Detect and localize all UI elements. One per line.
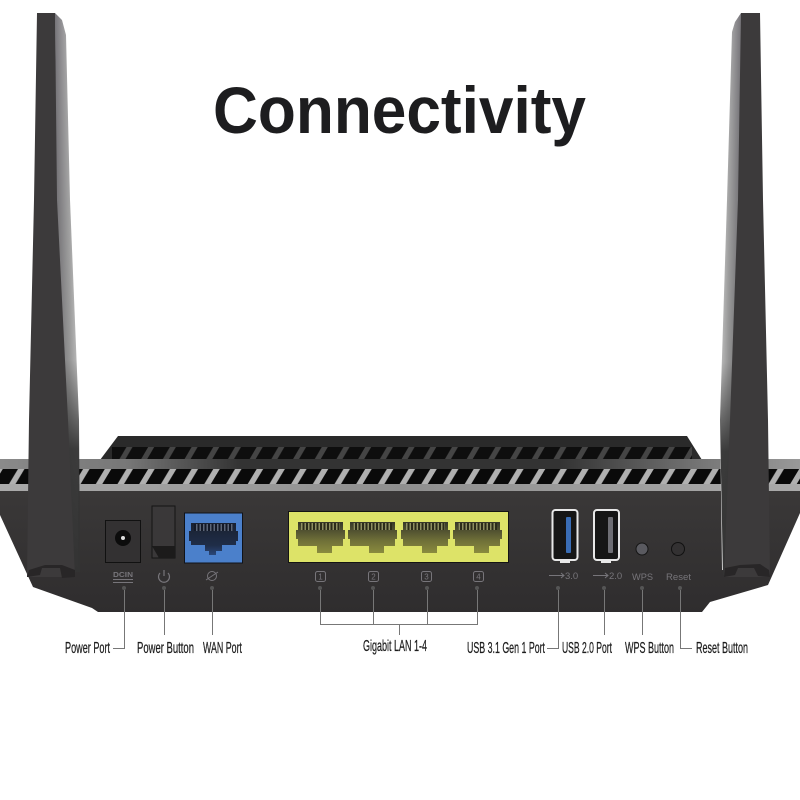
USB 2.0 port	[593, 510, 622, 590]
WPS button: WPS	[632, 572, 653, 583]
LAN number labels: 3	[424, 572, 429, 582]
power button	[152, 506, 175, 590]
rear panel	[0, 491, 800, 612]
USB 3.0 port	[549, 510, 578, 590]
USB 3.0 port: 3.0	[565, 571, 578, 582]
LAN ports	[288, 512, 508, 590]
LAN port 4	[453, 522, 502, 553]
LAN number labels: 4	[476, 572, 481, 582]
connector lines	[113, 590, 692, 648]
port labels: Power Port	[65, 640, 110, 657]
WAN port	[184, 513, 242, 590]
WPS button	[632, 543, 653, 590]
LAN port 3	[401, 522, 450, 553]
LAN number labels	[316, 572, 484, 582]
top vent wedge	[100, 436, 702, 460]
LAN port 2	[348, 522, 397, 553]
title: Connectivity	[213, 73, 586, 147]
port labels: USB 3.1 Gen 1 Port	[467, 640, 545, 657]
port labels: WPS Button	[625, 640, 674, 657]
power port	[106, 520, 140, 590]
rear vent strip	[0, 459, 800, 491]
port labels: Gigabit LAN 1-4	[363, 638, 427, 655]
reset button: Reset	[666, 572, 691, 583]
reset button	[666, 542, 691, 590]
power port: DCIN	[113, 572, 133, 579]
port labels: USB 2.0 Port	[562, 640, 612, 657]
port labels: Reset Button	[696, 640, 748, 657]
LAN number labels: 1	[318, 572, 323, 582]
left antenna	[27, 13, 80, 578]
port labels: WAN Port	[203, 640, 242, 657]
port labels	[65, 638, 748, 657]
right antenna	[720, 13, 770, 577]
USB 2.0 port: 2.0	[609, 571, 622, 582]
port labels: Power Button	[137, 640, 194, 657]
LAN number labels: 2	[371, 572, 376, 582]
LAN port 1	[296, 522, 345, 553]
router body	[0, 436, 800, 612]
